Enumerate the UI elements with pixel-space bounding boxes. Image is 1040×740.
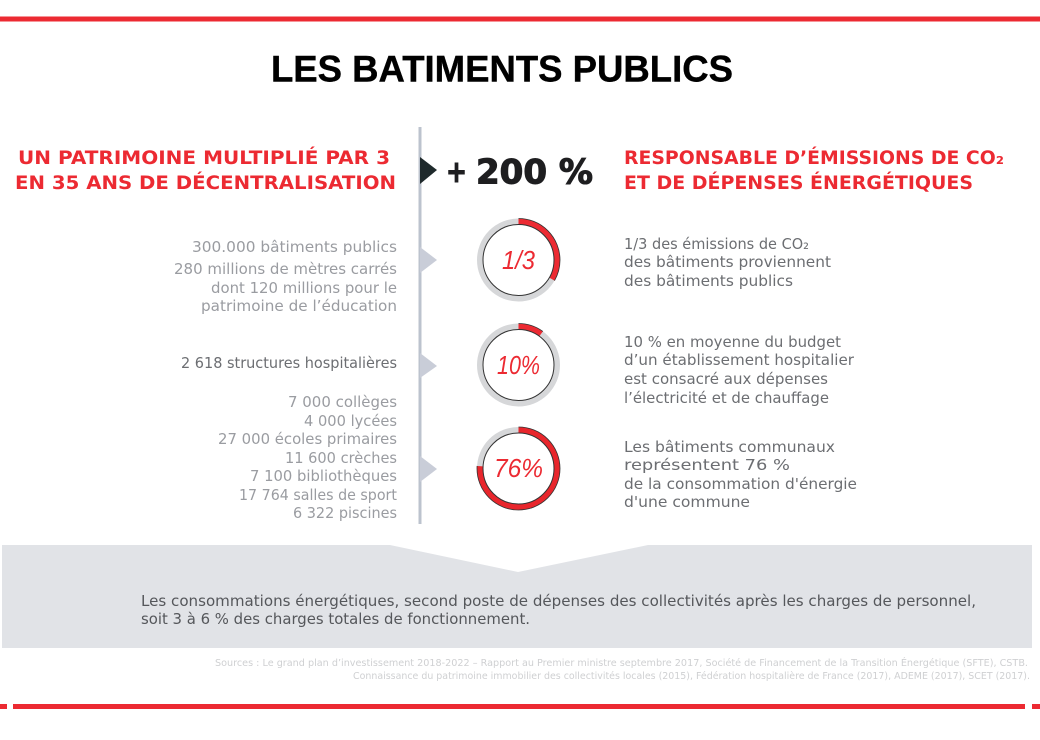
bottom red rule: [0, 704, 1040, 709]
right heading: RESPONSABLE D’ÉMISSIONS DE CO₂: [624, 146, 1004, 169]
donut: 10 %: 10%: [497, 350, 540, 380]
left text: hospitals: 2 618 structures hospitalières: [181, 354, 397, 372]
right text: municipal buildings: de la consommation d'énergie: [624, 475, 857, 493]
left text: facilities list: 17 764 salles de sport: [239, 486, 397, 504]
left text: facilities list: 11 600 crèches: [285, 449, 397, 467]
top red rule: [0, 16, 1040, 22]
conclusion banner: Les consommations énergétiques, second poste de dépenses des collectivités après les charges de personnel,: [141, 592, 976, 610]
left text: facilities list: 7 100 bibliothèques: [250, 467, 397, 485]
left text: facilities list: 4 000 lycées: [304, 412, 397, 430]
sources: [215, 657, 1030, 682]
left text: facilities list: 7 000 collèges: [288, 393, 397, 411]
right text: hospital budget: d’un établissement hospitalier: [624, 351, 855, 369]
key figure: +200 %: +: [446, 155, 467, 190]
right text: municipal buildings: d'une commune: [624, 493, 750, 511]
left heading: EN 35 ANS DE DÉCENTRALISATION: [15, 171, 396, 194]
title: LES BATIMENTS PUBLICS: [271, 48, 733, 90]
right heading: [624, 146, 1004, 194]
left text: buildings and surface: patrimoine de l’éducation: [201, 297, 397, 315]
sources: Sources : Le grand plan d’investissement 2018-2022 – Rapport au Premier ministre septembre 2017, Société de Financement de la Transition Énergétique (SFTE), CSTB.: [215, 657, 1028, 669]
right text: hospital budget: est consacré aux dépenses: [624, 370, 828, 388]
central vertical timeline with arrows: [418, 127, 437, 524]
left text: buildings and surface: 280 millions de mètres carrés: [174, 260, 397, 278]
left heading: UN PATRIMOINE MULTIPLIÉ PAR 3: [18, 146, 390, 169]
right text: CO2 emissions: des bâtiments publics: [624, 272, 793, 290]
conclusion banner: [2, 545, 1032, 648]
conclusion banner: soit 3 à 6 % des charges totales de fonctionnement.: [141, 610, 530, 628]
donut: 10 %: [477, 324, 560, 406]
key figure: +200 %: 200 %: [476, 152, 593, 192]
right heading: ET DE DÉPENSES ÉNERGÉTIQUES: [624, 171, 973, 194]
sources: Connaissance du patrimoine immobilier des collectivités locales (2015), Fédération hospitalière de France (2017), ADEME (2017), SCET (2017).: [353, 671, 1030, 682]
right text: hospital budget: 10 % en moyenne du budget: [624, 333, 841, 351]
left text: facilities list: [218, 393, 397, 522]
left heading: [15, 146, 396, 194]
left text: buildings and surface: 300.000 bâtiments publics: [192, 238, 397, 256]
right text: hospital budget: [624, 333, 855, 407]
donut: 76 %: [477, 427, 560, 510]
donut: 1/3: [477, 218, 560, 302]
left text: buildings and surface: dont 120 millions pour le: [211, 279, 397, 297]
right text: CO2 emissions: 1/3 des émissions de CO₂: [624, 235, 809, 253]
left text: facilities list: 6 322 piscines: [293, 504, 397, 522]
right text: CO2 emissions: des bâtiments proviennent: [624, 253, 831, 271]
right text: municipal buildings: représentent 76 %: [624, 456, 790, 474]
left text: buildings and surface: [174, 238, 397, 315]
right text: CO2 emissions: [624, 235, 831, 290]
right text: municipal buildings: [624, 438, 857, 511]
right text: municipal buildings: Les bâtiments communaux: [624, 438, 835, 456]
right text: hospital budget: l’électricité et de chauffage: [624, 389, 829, 407]
left text: facilities list: 27 000 écoles primaires: [218, 430, 397, 448]
donut: 76 %: 76%: [494, 453, 543, 483]
donut: 1/3: 1/3: [502, 245, 535, 275]
